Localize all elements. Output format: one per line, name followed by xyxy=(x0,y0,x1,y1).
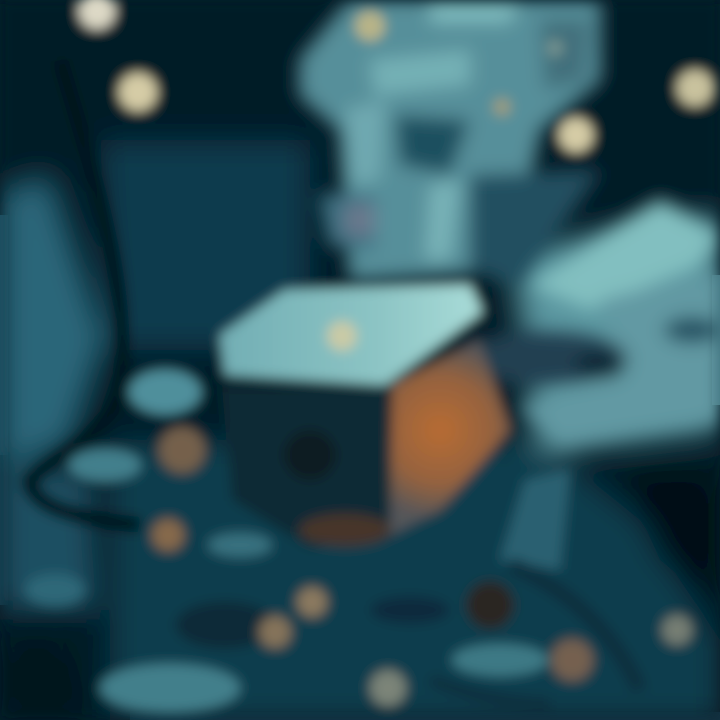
lights: cream glowing dots xyxy=(79,0,713,351)
tower: central pale-teal column xyxy=(300,0,600,285)
box roof xyxy=(220,285,482,385)
box: roof, front and glowing side xyxy=(220,285,510,548)
stones: teal and dark patches xyxy=(25,370,640,712)
box inner shadow xyxy=(299,514,391,546)
panel: left sky and teal walls xyxy=(0,140,310,610)
lights: amber lower dots xyxy=(152,427,692,706)
panel: lower scene base xyxy=(0,215,720,720)
box orange side xyxy=(390,340,510,535)
curve: dark vine on the left xyxy=(30,60,140,525)
waves: right pale lobes xyxy=(463,200,720,445)
box front face xyxy=(222,388,392,548)
edge strips: keep edge colours under the blur xyxy=(0,215,720,720)
